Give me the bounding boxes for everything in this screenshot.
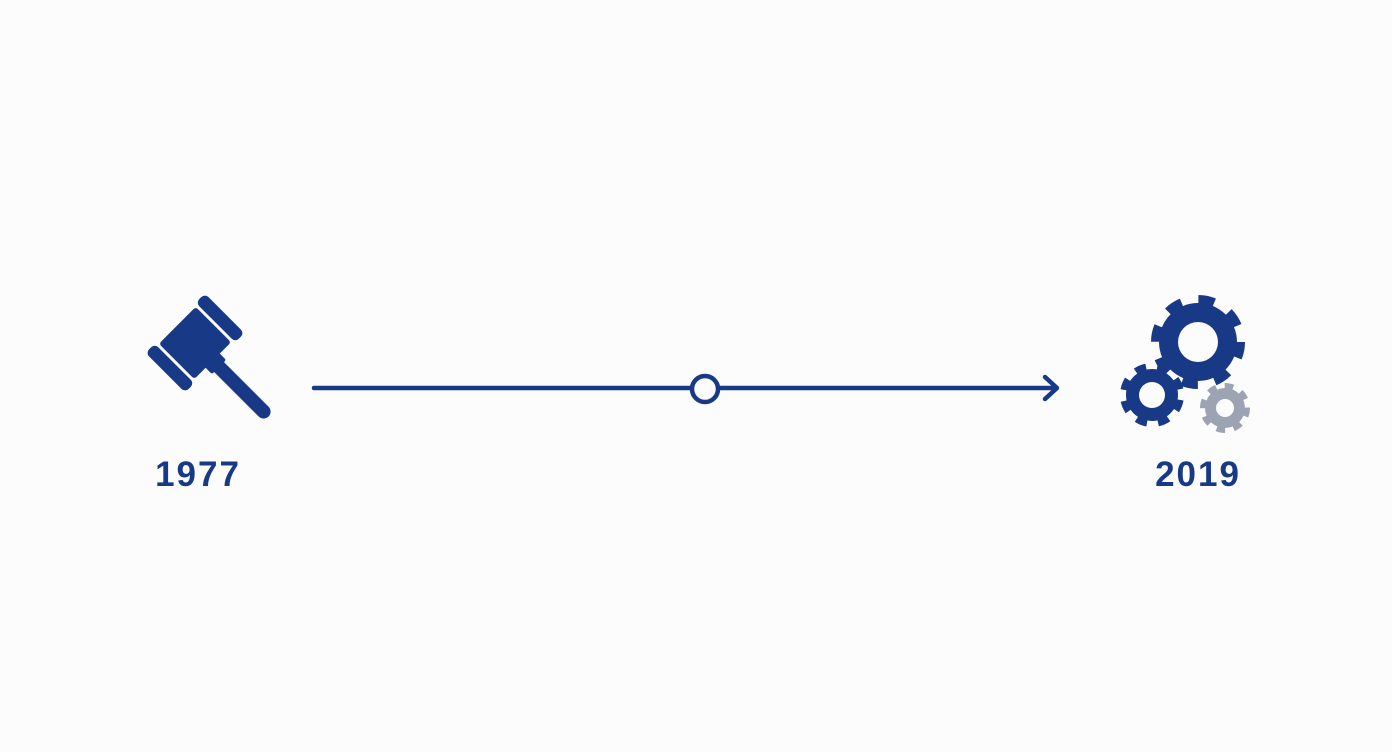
midpoint marker xyxy=(692,376,718,402)
label: 1977: 1977 xyxy=(155,455,241,494)
label: 2019: 2019 xyxy=(1155,455,1241,494)
